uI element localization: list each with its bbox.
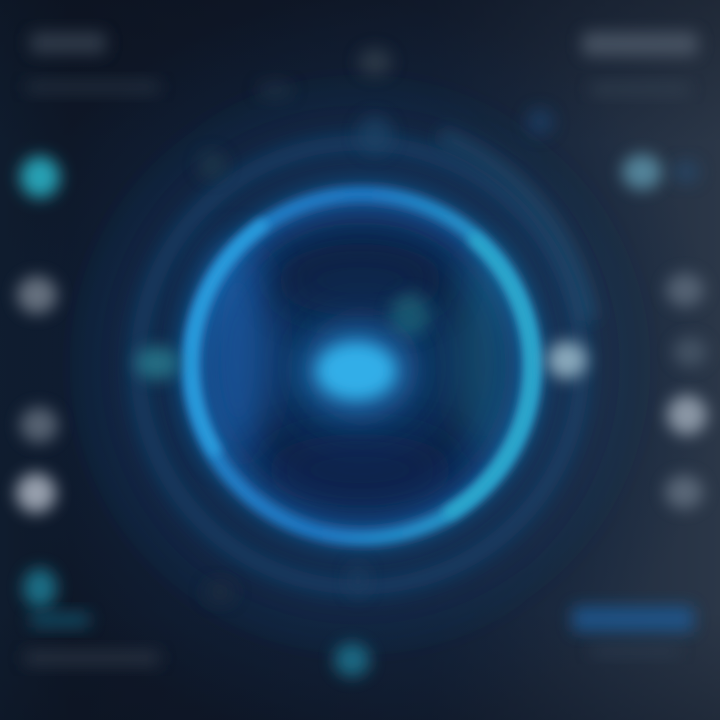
heading blocks bbox=[26, 32, 698, 96]
central core bbox=[296, 324, 416, 420]
central disc bbox=[188, 192, 536, 540]
ring side nodes bbox=[135, 341, 587, 380]
outer rings bbox=[85, 90, 635, 640]
footer blocks bbox=[24, 606, 694, 666]
top and bottom nodes bbox=[198, 48, 554, 677]
left column icons bbox=[16, 156, 60, 608]
main glowing ring bbox=[190, 194, 534, 538]
right column icons bbox=[622, 154, 707, 509]
